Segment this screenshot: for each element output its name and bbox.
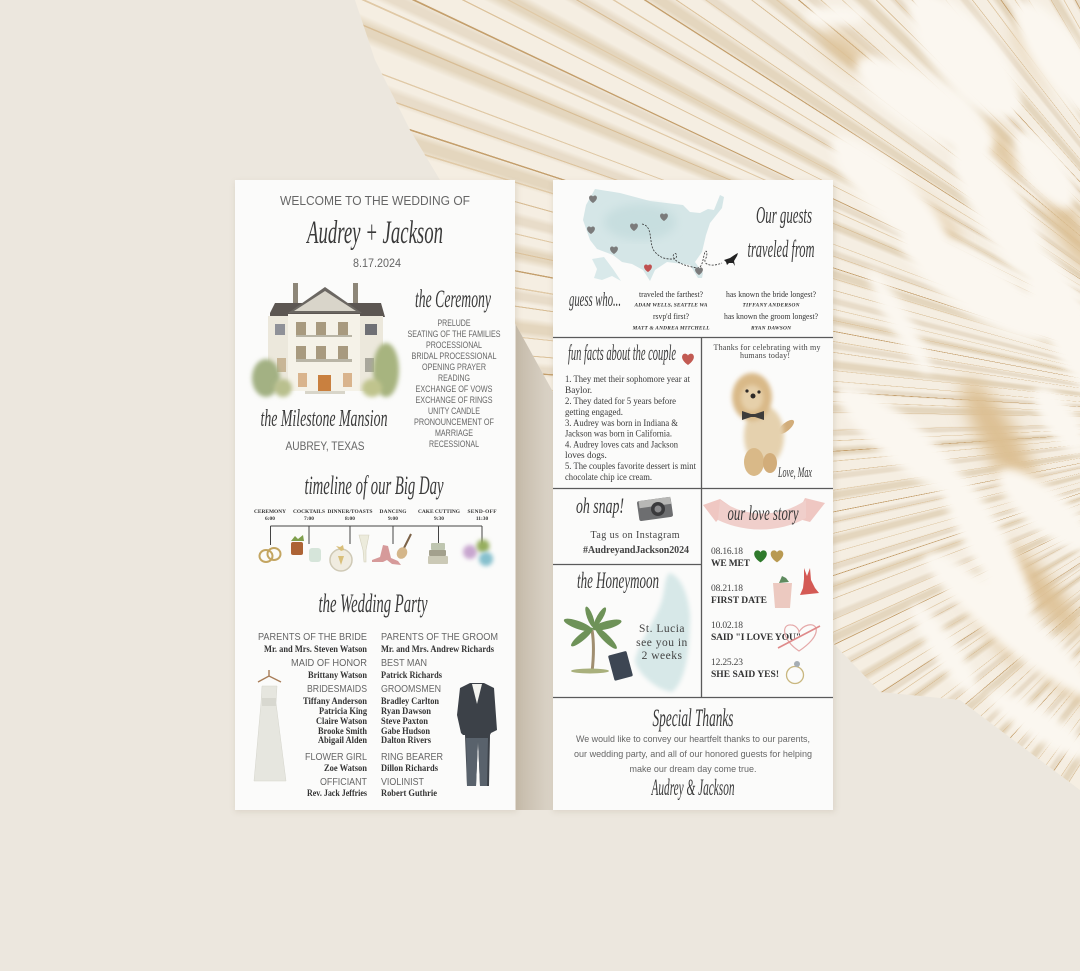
timeline chart: CAKE CUTTING <box>418 509 461 515</box>
map route <box>642 224 722 268</box>
pink ribbon banner <box>703 498 825 530</box>
timeline chart: CEREMONY <box>254 509 286 515</box>
icon: place setting and flutes <box>330 535 369 571</box>
card shadows <box>235 182 835 812</box>
wedding party: groom side: RING BEARER <box>381 752 443 763</box>
icon: camera <box>637 497 673 521</box>
honeymoon text <box>636 623 688 662</box>
icon: guitar <box>395 534 411 561</box>
map hearts <box>587 195 703 275</box>
fun facts list <box>565 375 696 483</box>
love story timeline: SHE SAID YES! <box>711 670 779 680</box>
timeline chart: 6:00 <box>265 516 275 522</box>
guess who answers <box>632 290 818 332</box>
panel: guest details card: Audrey & Jackson <box>651 775 734 800</box>
icon: cocktail glass <box>773 576 792 608</box>
timeline chart <box>254 509 497 571</box>
dog thank-you message: humans today! <box>740 351 790 360</box>
fun facts list: 5. The couples favorite dessert is mint <box>565 461 696 472</box>
tan shadows between pampas plumes <box>816 16 1080 709</box>
illustration: wedding dress on hanger <box>254 670 286 781</box>
wedding party: bride side: PARENTS OF THE BRIDE <box>258 632 367 643</box>
love story timeline: WE MET <box>711 559 751 569</box>
icon: glass <box>309 548 321 562</box>
wedding party: bride side: Brooke Smith <box>318 726 367 736</box>
icon: dancing shoes <box>372 545 401 565</box>
fun facts list: 3. Audrey was born in Indiana & <box>565 419 679 429</box>
fun facts list: 2. They dated for 5 years before <box>565 396 676 407</box>
guess who answers: traveled the farthest? <box>639 290 703 299</box>
panel: ceremony program card <box>235 180 515 810</box>
heading: our guests traveled from: traveled from <box>748 237 814 263</box>
love story timeline: 08.21.18 <box>711 584 743 594</box>
ceremony order list: PRONOUNCEMENT OF <box>414 417 494 427</box>
honeymoon text: see you in <box>636 637 688 649</box>
instagram text <box>583 530 689 556</box>
icon: wedding cake <box>428 543 448 564</box>
wedding party: bride side: Patricia King <box>319 706 367 716</box>
guess who answers: TIFFANY ANDERSON <box>742 302 801 308</box>
illustration: St. Lucia island <box>635 573 690 692</box>
wedding date: 8.17.2024 <box>353 256 401 270</box>
ceremony order list: UNITY CANDLE <box>428 406 480 416</box>
icon: red dress <box>800 568 819 595</box>
heading: our guests traveled from: Our guests <box>756 203 812 229</box>
ceremony heading: the Ceremony <box>415 286 491 313</box>
wedding party: groom side: Steve Paxton <box>381 716 428 726</box>
timeline chart: 11:30 <box>476 516 488 522</box>
ceremony order list: RECESSIONAL <box>429 439 479 449</box>
guess who answers: has known the bride longest? <box>726 290 816 299</box>
illustration: goldendoodle with bow tie <box>732 373 796 476</box>
instagram text: Tag us on Instagram <box>590 530 680 541</box>
fun facts list: getting engaged. <box>565 408 623 418</box>
heading: the honeymoon: the Honeymoon <box>577 568 659 593</box>
fun facts list: chocolate chip ice cream. <box>565 473 652 483</box>
wedding party: groom side: VIOLINIST <box>381 777 424 788</box>
timeline heading: timeline of our Big Day <box>304 471 444 500</box>
wedding party: groom side: BEST MAN <box>381 658 427 669</box>
timeline chart: 7:00 <box>304 516 314 522</box>
love story timeline <box>711 547 801 680</box>
wedding party: groom side: Patrick Richards <box>381 670 442 680</box>
timeline chart: 9:00 <box>388 516 398 522</box>
love story timeline: 08.16.18 <box>711 547 743 557</box>
guess who answers: has known the groom longest? <box>724 312 818 321</box>
icon: heart with arrow <box>778 625 820 651</box>
dried palm fan <box>356 0 1080 790</box>
wedding party: groom side: PARENTS OF THE GROOM <box>381 632 498 643</box>
icon: sparkler flowers <box>463 540 493 566</box>
heading: our guests traveled from <box>748 203 814 263</box>
fun facts list: 1. They met their sophomore year at <box>565 375 690 385</box>
ceremony order list: OPENING PRAYER <box>422 362 486 372</box>
wedding party heading: the Wedding Party <box>318 589 428 618</box>
timeline chart: 9:30 <box>434 516 444 522</box>
wedding party: bride side: Abigail Alden <box>318 735 367 745</box>
love story timeline: 12.25.23 <box>711 658 743 668</box>
wedding party: bride side: FLOWER GIRL <box>305 752 367 763</box>
guess who answers: rsvp'd first? <box>653 312 689 321</box>
thank-you message: We would like to convey our heartfelt thanks to our parents, <box>576 734 810 745</box>
ceremony order list: MARRIAGE <box>435 428 473 438</box>
timeline chart: DINNER/TOASTS <box>328 509 372 515</box>
guess who answers: ADAM WELLS, SEATTLE WA <box>634 302 708 308</box>
fun facts list: Baylor. <box>565 386 592 396</box>
card shadow in the gap between cards <box>516 325 553 810</box>
ceremony order list: EXCHANGE OF RINGS <box>416 395 492 405</box>
ceremony order list: READING <box>438 373 470 383</box>
wedding party: groom side: Mr. and Mrs. Andrew Richards <box>381 644 494 654</box>
US watercolor map <box>583 189 724 281</box>
honeymoon text: 2 weeks <box>642 650 682 662</box>
timeline chart: DANCING <box>380 509 407 515</box>
wedding party: groom side: Dalton Rivers <box>381 735 431 745</box>
thank-you message: our wedding party, and all of our honored guests for helping <box>574 749 812 760</box>
ceremony order list: PRELUDE <box>438 318 470 328</box>
signature: love max: Love, Max <box>777 465 812 481</box>
illustration: palm tree <box>563 606 623 674</box>
love story timeline: FIRST DATE <box>711 596 767 606</box>
icon: diamond ring <box>786 661 804 684</box>
ceremony order list: BRIDAL PROCESSIONAL <box>412 351 496 361</box>
icon: copper mug <box>291 535 304 555</box>
wedding party: bride side: Claire Watson <box>316 716 367 726</box>
wedding party: groom side: Robert Guthrie <box>381 788 437 798</box>
wedding party: groom side: Ryan Dawson <box>381 706 431 716</box>
guess who answers: RYAN DAWSON <box>750 326 792 332</box>
instagram text: #AudreyandJackson2024 <box>583 545 689 556</box>
icon: wedding rings <box>260 548 280 562</box>
ceremony order list: SEATING OF THE FAMILIES <box>408 329 500 339</box>
icon: green and gold hearts <box>754 550 783 562</box>
wedding party: groom side: GROOMSMEN <box>381 684 441 695</box>
pampas grass plumes <box>805 0 1080 770</box>
wedding party: bride side: Tiffany Anderson <box>303 696 367 706</box>
heading: guess who: guess who... <box>569 289 621 311</box>
ceremony order list: EXCHANGE OF VOWS <box>416 384 492 394</box>
venue name: the Milestone Mansion <box>260 406 388 432</box>
panel: guest details card <box>553 180 833 810</box>
wedding party: bride side: Zoe Watson <box>324 763 367 773</box>
dog thank-you message: Thanks for celebrating with my <box>714 343 820 352</box>
heading: welcome: WELCOME TO THE WEDDING OF <box>280 193 470 208</box>
couple names: Audrey + Jackson <box>306 215 443 251</box>
wedding party: bride side: Mr. and Mrs. Steven Watson <box>264 644 367 654</box>
thank-you message: make our dream day come true. <box>630 764 756 775</box>
love story timeline: SAID "I LOVE YOU" <box>711 633 801 643</box>
illustration: mansion <box>252 283 399 397</box>
venue location: AUBREY, TEXAS <box>286 439 364 453</box>
wedding party: bride side: Brittany Watson <box>308 670 367 680</box>
heading: special thanks: Special Thanks <box>652 705 734 732</box>
fun facts list: Jackson was born in California. <box>565 428 672 440</box>
fun facts list: 4. Audrey loves cats and Jackson <box>565 440 678 450</box>
thank-you message <box>574 734 812 775</box>
icon: passport <box>608 651 633 681</box>
love story timeline: 10.02.18 <box>711 621 743 631</box>
wedding party: bride side: BRIDESMAIDS <box>307 684 367 695</box>
fun facts list: loves dogs. <box>565 451 607 461</box>
ceremony order list: PROCESSIONAL <box>426 340 482 350</box>
timeline chart: 8:00 <box>345 516 355 522</box>
dog thank-you message <box>714 343 820 360</box>
heading: our love story: our love story <box>728 501 799 525</box>
wedding party: bride side: Rev. Jack Jeffries <box>307 788 367 798</box>
wedding party: groom side: Dillon Richards <box>381 763 438 773</box>
timeline chart: COCKTAILS <box>293 509 325 515</box>
wedding party: bride side: OFFICIANT <box>320 777 367 788</box>
wedding party: bride side: MAID OF HONOR <box>291 658 367 669</box>
panel: guest details card: fun facts about the couple <box>568 340 676 365</box>
ceremony order list <box>408 318 500 449</box>
icon: airplane <box>724 253 738 266</box>
wedding party: bride side <box>258 632 367 798</box>
wedding party: groom side <box>381 632 498 798</box>
wedding party: groom side: Gabe Hudson <box>381 726 430 736</box>
guess who answers: MATT & ANDREA MITCHELL <box>632 326 710 332</box>
timeline chart: SEND-OFF <box>468 509 497 515</box>
grid dividers <box>553 338 833 698</box>
wedding party: groom side: Bradley Carlton <box>381 696 439 706</box>
honeymoon text: St. Lucia <box>639 623 685 635</box>
illustration: tuxedo <box>457 683 497 786</box>
heading: oh snap: oh snap! <box>576 493 624 518</box>
icon: red heart <box>682 354 694 365</box>
